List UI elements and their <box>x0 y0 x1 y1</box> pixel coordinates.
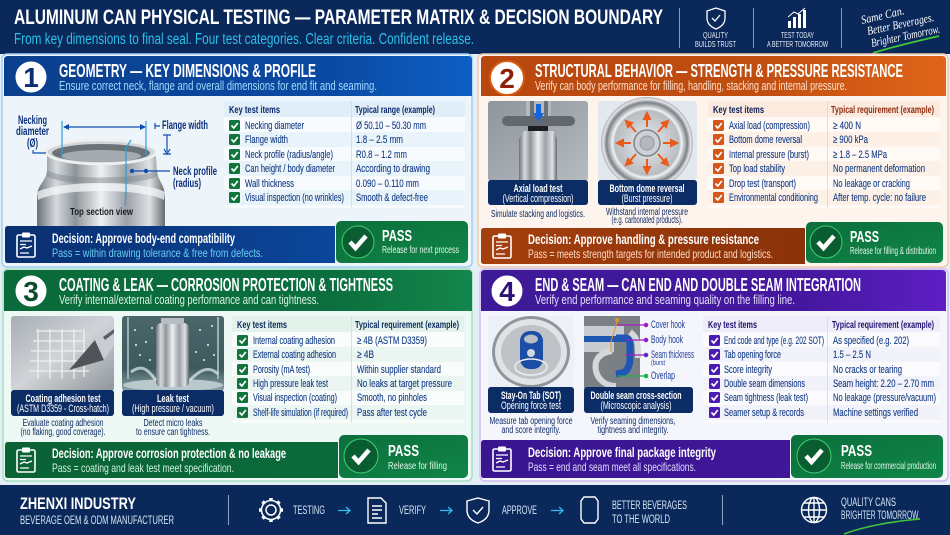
panel 3 table: Smooth, no pinholes <box>357 392 427 404</box>
subtitle: From key dimensions to final seal. Four test categories. Clear criteria. Confident release. <box>14 31 474 48</box>
badge: quality builds trust <box>679 8 736 49</box>
footer band <box>0 485 950 535</box>
panel 2 table: ≥ 900 kPa <box>833 134 869 146</box>
panel 3 table: ≥ 4B (ASTM D3359) <box>357 335 427 347</box>
can illustration with callouts: (radius) <box>173 178 201 190</box>
panel 4 table: No cracks or tearing <box>833 364 902 376</box>
can illustration with callouts: diameter <box>16 126 49 138</box>
panel 2 decision bar <box>481 228 805 264</box>
panel 4 table: Tab opening force <box>724 349 781 361</box>
icon: gear <box>259 498 283 522</box>
caption: (Burst pressure) <box>622 193 672 205</box>
image: axial load test <box>488 101 588 220</box>
image: coating adhesion test <box>11 316 114 438</box>
caption: Leak test <box>157 393 189 405</box>
panel 3 header: 3 <box>23 276 39 307</box>
panel 4 pass badge <box>791 435 943 478</box>
seam labels: Cover hook <box>651 319 685 331</box>
image: bottom dome: (e.g. carbonated products). <box>612 215 682 226</box>
panel 2 header: 2 <box>499 63 515 94</box>
panel 3 table: External coating adhesion <box>253 349 336 361</box>
panel 4 decision bar <box>481 440 790 478</box>
panel 3 table: Porosity (mA test) <box>253 364 310 376</box>
panel 2 header <box>481 56 946 96</box>
image: axial load test: Simulate stacking and logistics. <box>491 209 585 220</box>
icon: globe <box>802 498 826 522</box>
panel 4 header: Verify end performance and seaming quality on the filling line. <box>535 292 795 307</box>
panel 1 decision bar: Pass = within drawing tolerance & free from defects. <box>52 246 263 260</box>
panel 4 pass badge: PASS <box>841 443 872 460</box>
panel 1 header <box>4 56 472 96</box>
panel 2 table: Environmental conditioning <box>729 192 818 204</box>
panel 3 decision bar: Pass = coating and leak test meet specification. <box>52 461 234 475</box>
panel 1 table: Neck profile (radius/angle) <box>245 149 333 161</box>
panel 2 table: No leakage or cracking <box>833 178 910 190</box>
slogan: Better Beverages. <box>866 10 935 38</box>
panel 1 pass badge <box>336 221 468 263</box>
can illustration with callouts: Neck profile <box>173 166 217 178</box>
caption: Axial load test <box>514 183 563 195</box>
image: coating adhesion test: (no flaking, good coverage). <box>20 427 106 438</box>
panel 3: coating and leak <box>3 269 472 481</box>
badge: test today <box>753 8 828 49</box>
panel 4 decision bar: Pass = end and seam meet all specifications. <box>528 460 696 474</box>
testing label: TESTING <box>293 505 325 517</box>
panel 1 table: Wall thickness <box>245 178 294 190</box>
caption: (Vertical compression) <box>502 193 574 205</box>
panel 3 table: High pressure leak test <box>253 378 328 390</box>
panel 1 header: GEOMETRY — KEY DIMENSIONS & PROFILE <box>59 61 316 81</box>
panel 3 header: Verify internal/external coating performance and can tightness. <box>59 292 319 307</box>
image: leak test: to ensure can tightness. <box>136 427 210 438</box>
better beverages label: TO THE WORLD <box>612 514 670 526</box>
panel 1: geometry <box>2 54 472 267</box>
badge: test today: TEST TODAY <box>781 30 814 40</box>
panel 2 table <box>708 101 940 208</box>
image: coating adhesion test: Evaluate coating adhesion <box>22 418 104 429</box>
caption: (High pressure / vacuum) <box>132 403 214 415</box>
panel 4 table: Seam tightness (leak test) <box>724 392 808 404</box>
caption <box>122 390 224 416</box>
panel 1 table: Key test items <box>229 104 280 116</box>
better beverages label: BETTER BEVERAGES <box>612 500 687 512</box>
slogan <box>841 3 941 53</box>
panel 2 table: Top load stability <box>729 163 785 175</box>
panel 1 pass badge: PASS <box>382 228 412 245</box>
caption <box>488 387 574 413</box>
panel 2 table: Key test items <box>713 104 764 116</box>
panel 1 decision bar: Decision: Approve body-end compatibility <box>52 230 235 246</box>
arrow <box>440 507 452 514</box>
panel 2: structural behavior <box>478 54 948 267</box>
can illustration with callouts <box>16 115 217 226</box>
panel 3 table: Shelf-life simulation (if required) <box>253 407 348 419</box>
image: double seam cross-section: tightness and integrity. <box>598 425 668 436</box>
panel 2 table: ≥ 1.8 – 2.5 MPa <box>833 149 888 161</box>
image: leak test: Detect micro leaks <box>144 418 202 429</box>
panel 1 header: Ensure correct neck, flange and overall dimensions for end fit and seaming. <box>59 78 377 93</box>
caption: Stay-On Tab (SOT) <box>501 390 561 402</box>
panel 4 table: Score integrity <box>724 364 772 376</box>
panel 1 table: Ø 50.10 – 50.30 mm <box>356 120 426 132</box>
image: stay-on tab: and score integrity. <box>502 425 560 436</box>
panel 2 table: Drop test (transport) <box>729 178 796 190</box>
panel 4: end and seam <box>480 269 948 481</box>
icon: can <box>581 497 598 523</box>
title: ALUMINUM CAN PHYSICAL TESTING — PARAMETER MATRIX & DECISION BOUNDARY <box>14 6 663 29</box>
panel 1 table: Necking diameter <box>245 120 304 132</box>
can illustration with callouts: Necking <box>18 115 47 127</box>
badge: quality builds trust: BUILDS TRUST <box>695 39 736 49</box>
panel 4 table: End code and type (e.g. 202 SOT) <box>724 335 824 347</box>
panel 1 header: 1 <box>23 62 39 93</box>
panel 2 table: Bottom dome reversal <box>729 134 802 146</box>
panel 4 table: Key test items <box>708 319 757 331</box>
panel 3 table <box>232 316 464 423</box>
panel 4 table: Seamer setup & records <box>724 407 804 419</box>
panel 3 table: Typical requirement (example) <box>355 319 459 331</box>
panel 1 table: Typical range (example) <box>355 104 435 116</box>
panel 3 table: Pass after test cycle <box>357 407 427 419</box>
panel 3 pass badge: PASS <box>388 443 419 460</box>
seam labels: Seam thickness <box>651 349 694 361</box>
caption: Double seam cross-section <box>590 390 682 402</box>
image: stay-on tab: Measure tab opening force <box>490 416 573 427</box>
image: stay-on tab <box>488 316 574 436</box>
panel 3 pass badge: Release for filling <box>388 461 447 472</box>
caption: Opening force test <box>501 400 561 412</box>
caption: (Microscopic analysis) <box>600 400 672 412</box>
icon: shield <box>467 498 489 523</box>
caption <box>584 387 693 413</box>
panel 1 table: Flange width <box>245 134 288 146</box>
brand tagline: BEVERAGE OEM & ODM MANUFACTURER <box>20 515 174 527</box>
arrow <box>551 507 563 514</box>
seam labels: (burst <box>651 360 665 367</box>
panel 3 table: No leaks at target pressure <box>357 378 452 390</box>
caption: Bottom dome reversal <box>610 183 684 195</box>
caption <box>11 390 114 416</box>
panel 1 table: Smooth & defect-free <box>356 192 428 204</box>
seam labels: Body hook <box>651 334 683 346</box>
caption <box>488 180 588 205</box>
panel 3 header <box>4 270 472 311</box>
panel 3 header: COATING & LEAK — CORROSION PROTECTION & TIGHTNESS <box>59 275 393 295</box>
panel 1 table: R0.8 – 1.2 mm <box>356 149 407 161</box>
panel 2 table: ≥ 400 N <box>833 120 861 132</box>
panel 3 table: Key test items <box>237 319 287 331</box>
can illustration with callouts: Flange width <box>162 120 208 132</box>
badge: test today: A BETTER TOMORROW <box>767 39 828 49</box>
panel 3 pass badge <box>339 435 468 478</box>
approve label: APPROVE <box>502 505 537 517</box>
caption <box>598 180 697 205</box>
verify label: VERIFY <box>399 505 426 517</box>
panel 2 pass badge: PASS <box>850 229 879 246</box>
arrow <box>338 507 350 514</box>
panel 4 header: 4 <box>499 276 515 307</box>
caption: Coating adhesion test <box>26 393 101 405</box>
image: bottom dome <box>598 97 697 226</box>
seam labels: Overlap <box>651 370 675 382</box>
panel 3 table: Within supplier standard <box>357 364 441 376</box>
panel 3 decision bar: Decision: Approve corrosion protection & no leakage <box>52 445 286 461</box>
can illustration with callouts: (Ø) <box>27 138 38 150</box>
seam labels <box>617 319 694 382</box>
brand name: ZHENXI INDUSTRY <box>20 495 136 513</box>
panel 4 table: 1.5 – 2.5 N <box>833 349 871 361</box>
panel 1 table: Visual inspection (no wrinkles) <box>245 192 344 204</box>
badge: quality builds trust: QUALITY <box>703 30 728 40</box>
image: leak test <box>122 316 224 438</box>
header band <box>0 0 950 54</box>
image: double seam cross-section <box>584 316 694 436</box>
image: double seam cross-section: Verify seaming dimensions, <box>590 416 676 427</box>
panel 3 decision bar <box>5 442 338 478</box>
panel 2 table: Axial load (compression) <box>729 120 810 132</box>
panel 4 table: As specified (e.g. 202) <box>833 335 909 347</box>
better beverages label <box>612 500 687 526</box>
panel 1 table <box>224 101 465 208</box>
panel 1 pass badge: Release for next process <box>382 245 459 256</box>
panel 3 table: Visual inspection (coating) <box>253 392 337 404</box>
panel 4 table <box>703 316 940 423</box>
panel 2 decision bar: Decision: Approve handling & pressure resistance <box>528 231 759 247</box>
panel 2 decision bar: Pass = meets strength targets for intended product and logistics. <box>528 247 773 261</box>
panel 3 table: ≥ 4B <box>357 349 374 361</box>
panel 3 table: Internal coating adhesion <box>253 335 335 347</box>
panel 1 table: According to drawing <box>356 163 430 175</box>
panel 2 pass badge <box>806 222 943 263</box>
quality cans label <box>841 497 920 534</box>
panel 1 decision bar <box>5 226 335 263</box>
panel 4 decision bar: Decision: Approve final package integrity <box>528 444 716 460</box>
panel 2 table: Internal pressure (burst) <box>729 149 809 161</box>
icon: document <box>368 498 386 523</box>
quality cans label: QUALITY CANS <box>841 497 896 509</box>
image: bottom dome: Withstand internal pressure <box>606 207 688 218</box>
slogan: Same Can. <box>860 3 906 27</box>
caption: (ASTM D3359 - Cross-hatch) <box>17 403 109 415</box>
panel 1 table: 1.8 – 2.5 mm <box>356 134 403 146</box>
panel 1 table: Can height / body diameter <box>245 163 335 175</box>
panel 1 table: 0.090 – 0.110 mm <box>356 178 419 190</box>
panel 4 header <box>481 270 946 311</box>
can illustration with callouts: Top section view <box>70 206 134 218</box>
panel 4 table: Double seam dimensions <box>724 378 805 390</box>
